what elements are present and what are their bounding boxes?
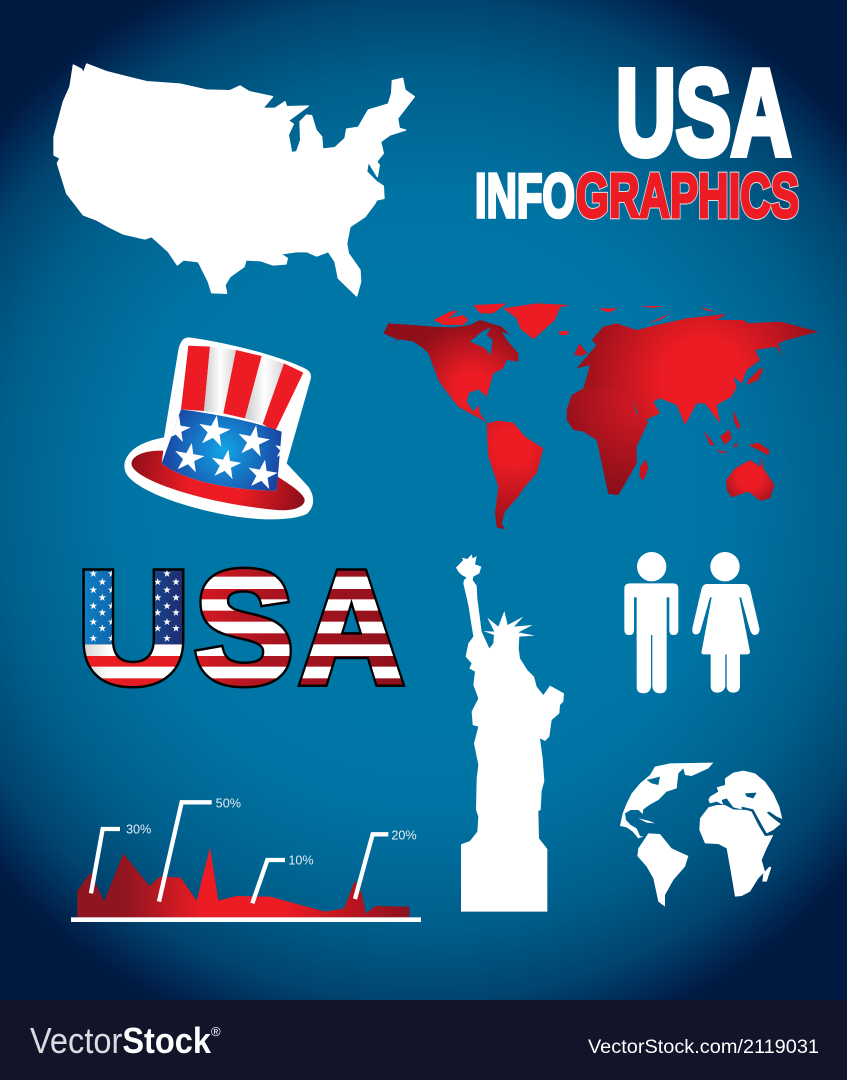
- hat star band: [162, 409, 295, 491]
- Statue of Liberty silhouette: [456, 554, 564, 912]
- lettering flag fill: U: [78, 540, 189, 716]
- Greenland and Arctic islands: [433, 303, 715, 339]
- lettering outline: [78, 540, 403, 716]
- Eurasia: [708, 771, 782, 833]
- woman figure: [692, 552, 759, 693]
- map: world in red: [379, 303, 818, 529]
- callout 30%: 30%: [126, 822, 151, 836]
- man figure: [624, 552, 678, 693]
- lettering outline: U: [78, 540, 189, 716]
- baseline: [71, 917, 421, 922]
- lettering outline: S: [195, 540, 293, 716]
- callout 20%: 20%: [391, 828, 417, 842]
- icon: white globe: [620, 763, 782, 907]
- South America: [637, 833, 688, 907]
- callout 10%: [252, 853, 314, 903]
- callout 20%: [355, 828, 417, 899]
- lettering flag fill: A: [300, 540, 403, 716]
- callout 30%: [91, 822, 151, 893]
- area series: [77, 847, 409, 917]
- footer image id: VectorStock.com/2119031: [588, 1037, 819, 1058]
- hat brim: [132, 451, 305, 510]
- flag-filled USA lettering: [78, 540, 403, 716]
- Australia: [726, 457, 775, 501]
- Madagascar: [639, 459, 648, 481]
- chart: red area with percentage callouts: [71, 797, 421, 922]
- North America: [379, 320, 518, 423]
- Africa: [699, 805, 773, 897]
- North America and Greenland: [620, 763, 713, 838]
- Eurasia: [577, 314, 818, 425]
- icon: Uncle Sam hat: [124, 337, 313, 519]
- South America: [487, 421, 543, 529]
- callout 10%: 10%: [288, 853, 314, 867]
- hat white sticker outline: [124, 337, 313, 519]
- registered mark: ®: [211, 1024, 221, 1039]
- callout 50%: 50%: [216, 797, 241, 811]
- Africa: [567, 388, 648, 495]
- icon: man and woman: [624, 552, 759, 693]
- Madagascar: [762, 867, 771, 882]
- footer band: [0, 1000, 847, 1080]
- callout 50%: [159, 797, 241, 902]
- title: [475, 44, 799, 231]
- lettering flag fill: S: [195, 540, 293, 716]
- hat crown stripes: [181, 346, 303, 432]
- footer logo: VectorStock: [30, 1020, 212, 1061]
- lettering flag fill: [78, 540, 403, 716]
- Britain, Japan, Southeast Asia and Oceania islands: [574, 343, 769, 456]
- title word: INFO: INFO: [475, 162, 575, 231]
- lettering outline: A: [300, 540, 403, 716]
- map: contiguous United States: [54, 64, 414, 296]
